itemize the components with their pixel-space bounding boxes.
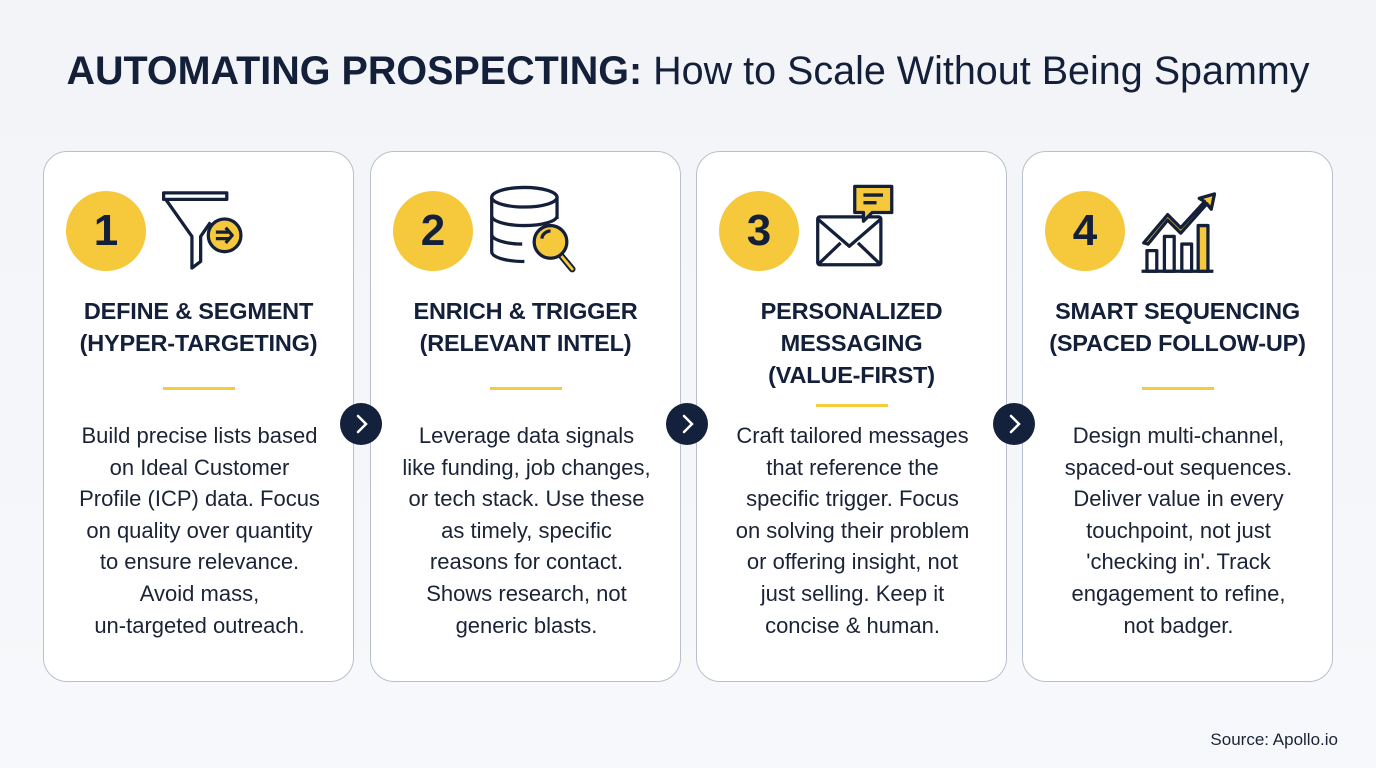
heading: SMART SEQUENCING (1055, 298, 1300, 324)
body text: Craft tailored messages (736, 423, 969, 448)
number badge 3: 3 (747, 206, 771, 255)
heading: (VALUE-FIRST) (768, 362, 935, 388)
icon: funnel (162, 191, 243, 270)
body text: or tech stack. Use these (408, 486, 644, 511)
body text: not badger. (1123, 613, 1234, 638)
title: AUTOMATING PROSPECTING: How to Scale Without Being Spammy (66, 49, 1310, 93)
icon: growth chart (1142, 192, 1216, 273)
icon: envelope with chat bubble (816, 184, 894, 266)
body text: specific trigger. Focus (746, 486, 959, 511)
body text: just selling. Keep it (761, 581, 944, 606)
number badge 4 (1045, 191, 1125, 271)
arrow 2 (666, 403, 708, 445)
number badge 1: 1 (94, 206, 118, 255)
body text: un-targeted outreach. (94, 613, 305, 638)
arrow 3 (993, 403, 1035, 445)
body text: Leverage data signals (419, 423, 634, 448)
body text: 'checking in'. Track (1086, 549, 1271, 574)
heading: MESSAGING (781, 330, 922, 356)
number badge 2 (393, 191, 473, 271)
heading (80, 298, 317, 356)
heading: PERSONALIZED (761, 298, 942, 324)
arrow 1 (340, 403, 382, 445)
heading: DEFINE & SEGMENT (84, 298, 313, 324)
panel: define & segment (43, 151, 354, 682)
panel: smart sequencing (1022, 151, 1333, 682)
body text: Profile (ICP) data. Focus (79, 486, 320, 511)
body text: Build precise lists based (81, 423, 318, 448)
number badge 2: 2 (421, 206, 445, 255)
body text: Shows research, not (426, 581, 627, 606)
number badge 4: 4 (1073, 206, 1097, 255)
body text: spaced-out sequences. (1065, 455, 1292, 480)
body text: Avoid mass, (140, 581, 259, 606)
body text: reasons for contact. (430, 549, 623, 574)
heading: (HYPER-TARGETING) (80, 330, 317, 356)
body text: on Ideal Customer (110, 455, 289, 480)
body text (1065, 423, 1292, 638)
heading (414, 298, 638, 356)
body text: touchpoint, not just (1086, 518, 1271, 543)
heading (761, 298, 942, 388)
icon: database search (490, 186, 576, 272)
body text: as timely, specific (441, 518, 612, 543)
body text: generic blasts. (456, 613, 597, 638)
heading: ENRICH & TRIGGER (414, 298, 637, 324)
number badge 1 (66, 191, 146, 271)
body text: or offering insight, not (747, 549, 958, 574)
number badge 3 (719, 191, 799, 271)
body text (736, 423, 969, 638)
body text: to ensure relevance. (100, 549, 299, 574)
heading: (RELEVANT INTEL) (420, 330, 631, 356)
body text: Design multi-channel, (1073, 423, 1284, 448)
heading: (SPACED FOLLOW-UP) (1049, 330, 1306, 356)
body text (79, 423, 320, 638)
body text: on quality over quantity (86, 518, 313, 543)
source: Source: Apollo.io (1210, 730, 1338, 749)
body text: Deliver value in every (1073, 486, 1284, 511)
body text: like funding, job changes, (402, 455, 651, 480)
body text: on solving their problem (736, 518, 969, 543)
body text (402, 423, 651, 638)
body text: concise & human. (765, 613, 940, 638)
panel: personalized messaging (696, 151, 1007, 682)
body text: that reference the (766, 455, 939, 480)
heading (1049, 298, 1306, 356)
body text: engagement to refine, (1071, 581, 1286, 606)
panel: enrich & trigger (370, 151, 681, 682)
